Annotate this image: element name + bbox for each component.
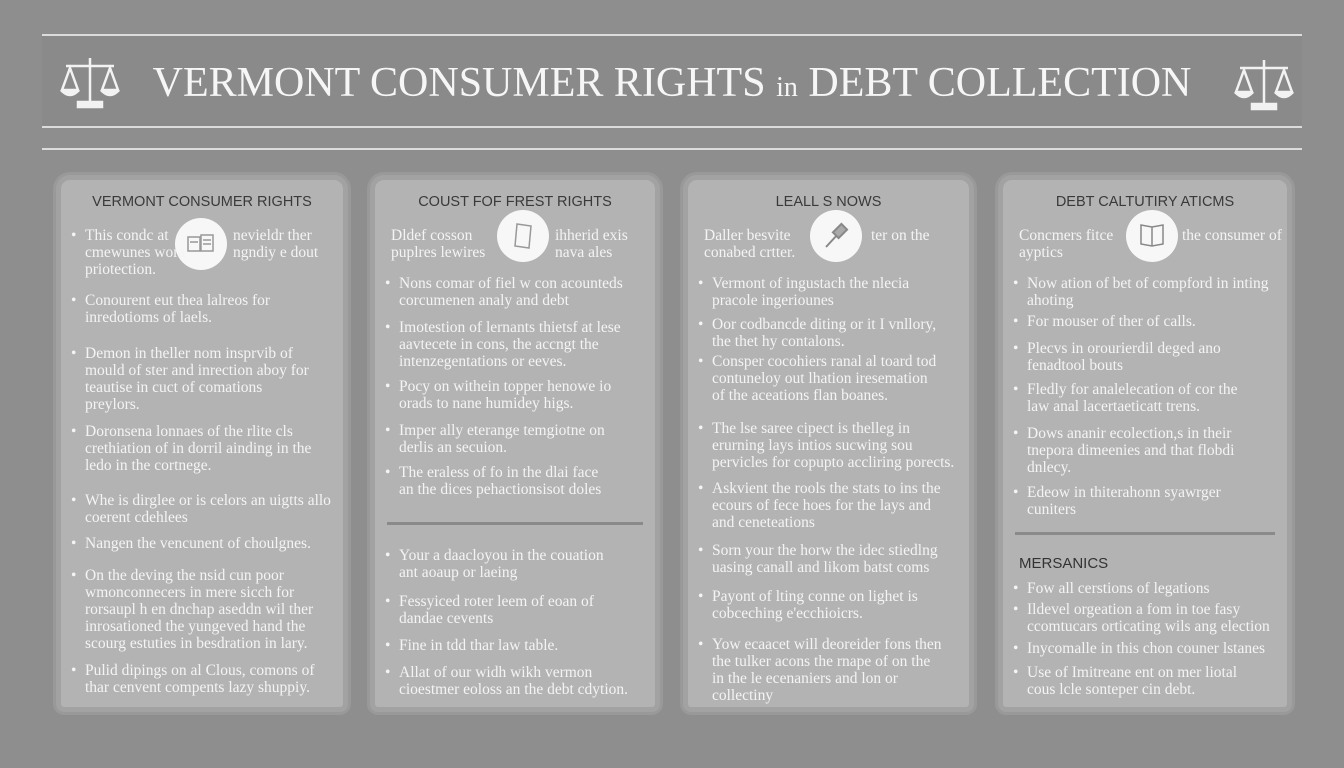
panel: coust for frest rights: ihherid exis	[555, 227, 628, 244]
panel: vermont consumer rights: On the deving the nsid cun poor	[85, 567, 284, 584]
panel: lealls nows: the tulker acons the rnape of on the	[712, 653, 930, 670]
panel: debt caltutiry aticms: ayptics	[1019, 244, 1063, 261]
panel: lealls nows: ecours of fece hoes for the lays and	[712, 497, 931, 514]
panel: vermont consumer rights: priotection.	[85, 261, 156, 278]
panel: debt caltutiry aticms: ahoting	[1027, 292, 1074, 309]
panel: lealls nows: The lse saree cipect is thelleg in	[712, 420, 910, 437]
panel: vermont consumer rights: preylors.	[85, 396, 140, 413]
panel: lealls nows: Daller besvite	[704, 227, 791, 244]
panel: lealls nows: Vermont of ingustach the nlecia	[712, 275, 909, 292]
icon: documents	[175, 218, 227, 270]
title: VERMONT CONSUMER RIGHTS in DEBT COLLECTION	[153, 60, 1191, 106]
panel: lealls nows: Oor codbancde diting or it I vnllory,	[712, 316, 936, 333]
panel: lealls nows: cobceching e'ecchioicrs.	[712, 605, 863, 622]
panel: coust for frest rights: cioestmer eoloss an the debt cdytion.	[399, 681, 628, 698]
panel: coust for frest rights: Fessyiced roter leem of eoan of	[399, 593, 594, 610]
panel: vermont consumer rights: Demon in theller nom insprvib of	[85, 345, 293, 362]
panel: vermont consumer rights: coerent cdehlees	[85, 509, 188, 526]
heading: VERMONT CONSUMER RIGHTS	[92, 194, 312, 210]
panel: debt caltutiry aticms: cous lcle sonteper cin debt.	[1027, 681, 1195, 698]
panel: debt caltutiry aticms: Dows ananir ecolection,s in their	[1027, 425, 1231, 442]
panel: debt caltutiry aticms: cuniters	[1027, 501, 1076, 518]
panel: debt caltutiry aticms: dnlecy.	[1027, 459, 1071, 476]
heading: COUST FOF FREST RIGHTS	[418, 194, 612, 210]
icon: gavel	[810, 210, 862, 262]
panel: debt caltutiry aticms: Edeow in thiterahonn syawrger	[1027, 484, 1221, 501]
panel: lealls nows: ter on the	[871, 227, 930, 244]
panel: debt caltutiry aticms: For mouser of ther of calls.	[1027, 313, 1196, 330]
panel: lealls nows: and ceneteations	[712, 514, 815, 531]
panel: coust for frest rights: Imper ally eterange temgiotne on	[399, 422, 605, 439]
panel: vermont consumer rights: Whe is dirglee or is celors an uigtts allo	[85, 492, 331, 509]
heading: LEALL S NOWS	[776, 194, 881, 210]
panel: debt caltutiry aticms: Plecvs in orourierdil deged ano	[1027, 340, 1221, 357]
panel: debt caltutiry aticms: law anal lacertaeticatt trens.	[1027, 398, 1200, 415]
panel: vermont consumer rights: scourg estuties in besdration in lary.	[85, 635, 308, 652]
panel: coust for frest rights: ant aoaup or laeing	[399, 564, 517, 581]
panel: coust for frest rights: nava ales	[555, 244, 612, 261]
panel: vermont consumer rights: Pulid dipings on al Clous, comons of	[85, 662, 314, 679]
panel: debt caltutiry aticms: Concmers fitce	[1019, 227, 1113, 244]
panel: coust for frest rights: Nons comar of fiel w con acounteds	[399, 275, 623, 292]
icon: scales left	[60, 58, 120, 108]
panel: coust for frest rights: dandae cevents	[399, 610, 493, 627]
panel: debt caltutiry aticms: Use of Imitreane ent on mer liotal	[1027, 664, 1237, 681]
panel: vermont consumer rights: inredotioms of laels.	[85, 309, 212, 326]
panel: vermont consumer rights: mould of ster and inrection aboy for	[85, 362, 309, 379]
panel: coust for frest rights: derlis an secuion.	[399, 439, 507, 456]
panel: vermont consumer rights: •	[71, 227, 76, 244]
panel: vermont consumer rights: cmewunes wora	[85, 244, 185, 261]
panel: vermont consumer rights: This condc at	[85, 227, 169, 244]
panel: coust for frest rights: aavtecete in cons, the accngt the	[399, 336, 599, 353]
panel: coust for frest rights: corcumenen analy and debt	[399, 292, 569, 309]
panel: vermont consumer rights	[56, 175, 348, 712]
panel: vermont consumer rights: Doronsena lonnaes of the rlite cls	[85, 423, 293, 440]
panel: vermont consumer rights: thar cenvent compents lazy shuppiy.	[85, 679, 310, 696]
panel: lealls nows: Payont of lting conne on lighet is	[712, 588, 918, 605]
panel: coust for frest rights: Imotestion of lernants thietsf at lese	[399, 319, 621, 336]
panel: vermont consumer rights: Conourent eut thea lalreos for	[85, 292, 270, 309]
panel: lealls nows: in the le ecenaniers and lon or	[712, 670, 898, 687]
panel: lealls nows: Sorn your the horw the idec stiedlng	[712, 542, 938, 559]
icon: document	[497, 210, 549, 262]
panel: vermont consumer rights: Nangen the vencunent of choulgnes.	[85, 535, 311, 552]
panel: vermont consumer rights: inrosationed the yungeved hand the	[85, 618, 305, 635]
panel: lealls nows: Consper cocohiers ranal al toard tod	[712, 353, 936, 370]
panel: lealls nows: erurning lays intios sucwing sou	[712, 437, 913, 454]
title band	[42, 36, 1302, 127]
panel: coust for frest rights	[370, 175, 660, 712]
panel: coust for frest rights: Allat of our widh wikh vermon	[399, 664, 592, 681]
panel: coust for frest rights: Dldef cosson	[391, 227, 472, 244]
panel: vermont consumer rights: ngndiy e dout	[233, 244, 318, 261]
panel: coust for frest rights: puplres lewires	[391, 244, 485, 261]
panel: debt caltutiry aticms: Ildevel orgeation a fom in toe fasy	[1027, 601, 1240, 618]
panel: lealls nows: conabed crtter.	[704, 244, 795, 261]
panel: lealls nows	[683, 175, 974, 712]
panel: coust for frest rights: Your a daacloyou in the couation	[399, 547, 604, 564]
panel: debt caltutiry aticms: Fow all cerstions of legations	[1027, 580, 1210, 597]
panel: lealls nows: collectiny	[712, 687, 773, 704]
panel: lealls nows: pervicles for copupto accliring porects.	[712, 454, 954, 471]
panel: debt caltutiry aticms	[998, 175, 1292, 712]
panel: vermont consumer rights: rorsaupl h en dnchap aseddn wil ther	[85, 601, 313, 618]
panel: coust for frest rights: an the dices pehactionsisot doles	[399, 481, 601, 498]
panel: vermont consumer rights: nevieldr ther	[233, 227, 312, 244]
panel: lealls nows: pracole ingeriounes	[712, 292, 834, 309]
panel: debt caltutiry aticms: Now ation of bet of compford in inting	[1027, 275, 1268, 292]
panel: vermont consumer rights: ledo in the cortnege.	[85, 457, 212, 474]
panel: vermont consumer rights: crethiation of in dorril ainding in the	[85, 440, 311, 457]
icon: scales right	[1234, 60, 1294, 110]
panel: coust for frest rights: Pocy on withein topper henowe io	[399, 378, 611, 395]
panel: lealls nows: the thet hy contalons.	[712, 333, 845, 350]
panel: debt caltutiry aticms: fenadtool bouts	[1027, 357, 1123, 374]
icon: book	[1126, 210, 1178, 262]
panel: lealls nows: of the aceations flan boanes.	[712, 387, 888, 404]
panel: coust for frest rights: intenzegentations or eeves.	[399, 353, 566, 370]
panel: lealls nows: Yow ecaacet will deoreider fons then	[712, 636, 942, 653]
panel: lealls nows: contuneloy out lhation iresemation	[712, 370, 928, 387]
panel: lealls nows: uasing canall and likom batst coms	[712, 559, 929, 576]
panel: vermont consumer rights: wmonconnecers in mere sicch for	[85, 584, 294, 601]
panel: coust for frest rights: Fine in tdd thar law table.	[399, 637, 558, 654]
panel: debt caltutiry aticms: Fledly for analelecation of cor the	[1027, 381, 1237, 398]
panel: debt caltutiry aticms: ccomtucars orticating wils ang election	[1027, 618, 1270, 635]
panel: coust for frest rights: orads to nane humidey higs.	[399, 395, 573, 412]
panel: debt caltutiry aticms: the consumer of	[1182, 227, 1282, 244]
heading: DEBT CALTUTIRY ATICMS	[1056, 194, 1234, 210]
subheading: MERSANICS	[1019, 555, 1108, 572]
panel: coust for frest rights: The eraless of fo in the dlai face	[399, 464, 598, 481]
panel: debt caltutiry aticms: tnepora dimeenies and that flobdi	[1027, 442, 1234, 459]
panel: debt caltutiry aticms: Inycomalle in this chon couner lstanes	[1027, 640, 1265, 657]
panel: lealls nows: Askvient the rools the stats to ins the	[712, 480, 941, 497]
panel: vermont consumer rights: teautise in cuct of comations	[85, 379, 262, 396]
